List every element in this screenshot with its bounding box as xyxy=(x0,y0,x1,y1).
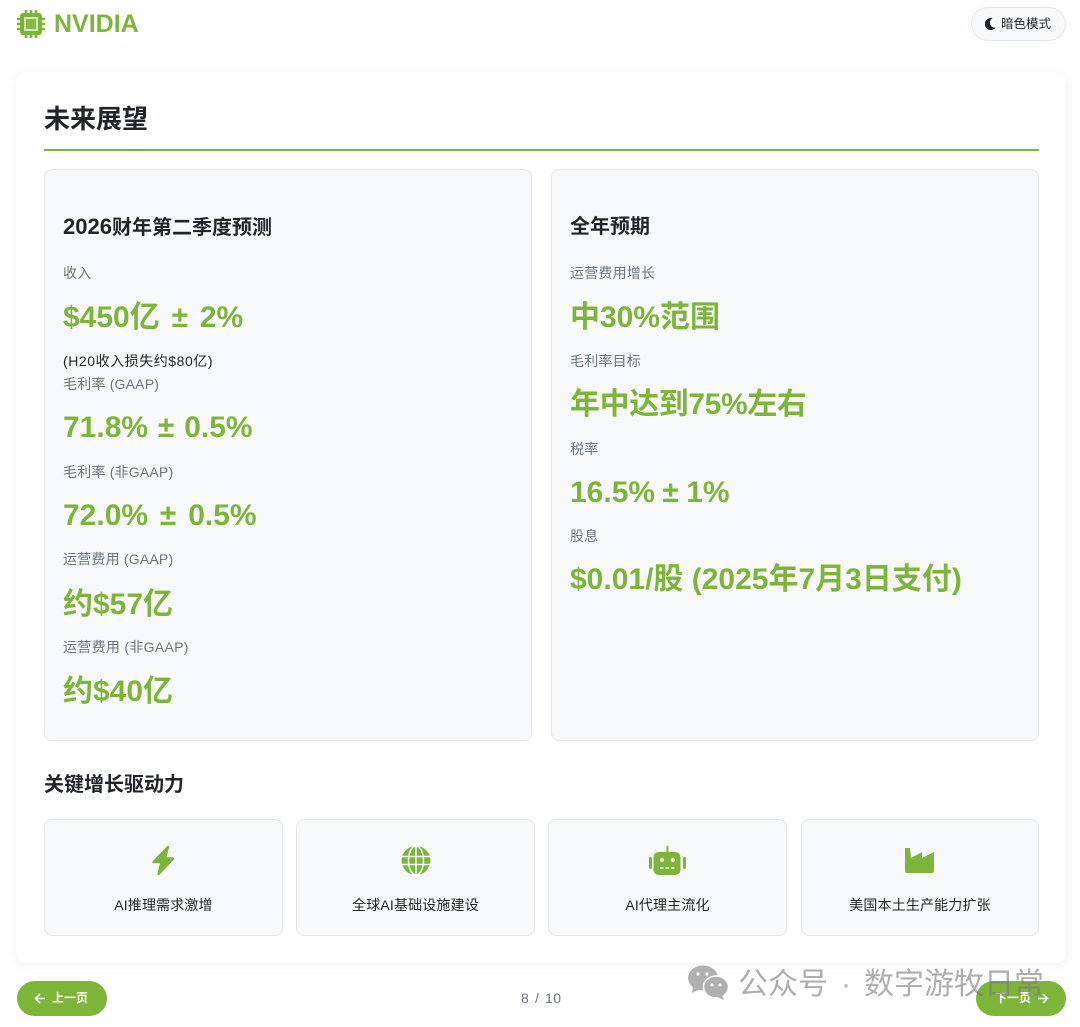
metric value: GAAP gross margin: 71.8% ± 0.5% xyxy=(63,411,253,444)
icon: bolt xyxy=(152,846,174,876)
heading: key growth drivers: 关键增长驱动力 xyxy=(44,774,184,796)
label: 美国本土生产能力扩张 xyxy=(849,897,991,913)
watermark: WeChat account: 数字游牧日常 xyxy=(864,968,1044,1001)
metric label: non-GAAP opex: 运营费用 (非GAAP) xyxy=(63,639,189,655)
label: AI代理主流化 xyxy=(625,897,710,913)
icon: globe xyxy=(402,846,430,875)
card: US manufacturing xyxy=(801,819,1039,936)
card: AI agents xyxy=(548,819,787,936)
watermark text xyxy=(738,968,1044,1001)
metric value: non-GAAP opex: 约$40亿 xyxy=(63,675,173,708)
metric value: GAAP opex: 约$57亿 xyxy=(63,588,173,621)
metric value: tax rate: 16.5% ± 1% xyxy=(570,476,730,509)
metric label: opex growth: 运营费用增长 xyxy=(570,265,655,281)
metric value: opex growth: 中30%范围 xyxy=(570,301,720,334)
metric value: margin target: 年中达到75%左右 xyxy=(570,388,806,421)
card: global AI infrastructure xyxy=(296,819,535,936)
metric label: dividend: 股息 xyxy=(570,528,598,544)
metric label: non-GAAP gross margin: 毛利率 (非GAAP) xyxy=(63,464,173,480)
icon: WeChat xyxy=(688,966,728,1000)
metric value: non-GAAP gross margin: 72.0% ± 0.5% xyxy=(63,499,257,532)
panel: full-year expectations xyxy=(551,169,1039,741)
card: AI inference xyxy=(44,819,283,936)
watermark: WeChat account: · xyxy=(841,968,851,1001)
watermark text: 公众号 xyxy=(738,968,828,1001)
dark mode toggle button xyxy=(971,7,1066,41)
label: 暗色模式 xyxy=(1001,17,1051,31)
page indicator: 8 / 10 xyxy=(521,990,561,1006)
metric label: revenue: 收入 xyxy=(63,265,91,281)
watermark: WeChat account xyxy=(688,966,1044,1001)
label: 全球AI基础设施建设 xyxy=(352,897,479,913)
panel: Q2 FY2026 forecast xyxy=(44,169,532,741)
icon: factory xyxy=(905,848,934,873)
icon: chip xyxy=(17,10,45,38)
previous page button xyxy=(17,981,107,1016)
icon: robot xyxy=(649,846,686,875)
label: 上一页 xyxy=(52,991,88,1005)
icon: left arrow xyxy=(34,994,45,1004)
metric value: revenue: $450亿 ± 2% xyxy=(63,301,243,334)
label: 下一页 xyxy=(995,991,1031,1005)
title underline xyxy=(44,149,1039,151)
wordmark: NVIDIA xyxy=(54,10,139,38)
metric label: margin target: 毛利率目标 xyxy=(570,353,641,369)
logo: NVIDIA chip icon and wordmark xyxy=(17,10,139,38)
metric label: GAAP gross margin: 毛利率 (GAAP) xyxy=(63,376,159,392)
heading: full year: 全年预期 xyxy=(570,216,650,238)
note: H20 loss: (H20收入损失约$80亿) xyxy=(63,353,213,369)
metric label: tax rate: 税率 xyxy=(570,441,598,457)
icon: moon xyxy=(985,18,996,30)
title: 未来展望 xyxy=(44,104,148,134)
heading: Q2 forecast: 2026财年第二季度预测 xyxy=(63,214,272,239)
metric label: GAAP opex: 运营费用 (GAAP) xyxy=(63,551,173,567)
icon: right arrow xyxy=(1038,994,1048,1004)
next page button xyxy=(976,981,1066,1016)
label: AI推理需求激增 xyxy=(114,897,213,913)
metric value: dividend: $0.01/股 (2025年7月3日支付) xyxy=(570,563,962,596)
